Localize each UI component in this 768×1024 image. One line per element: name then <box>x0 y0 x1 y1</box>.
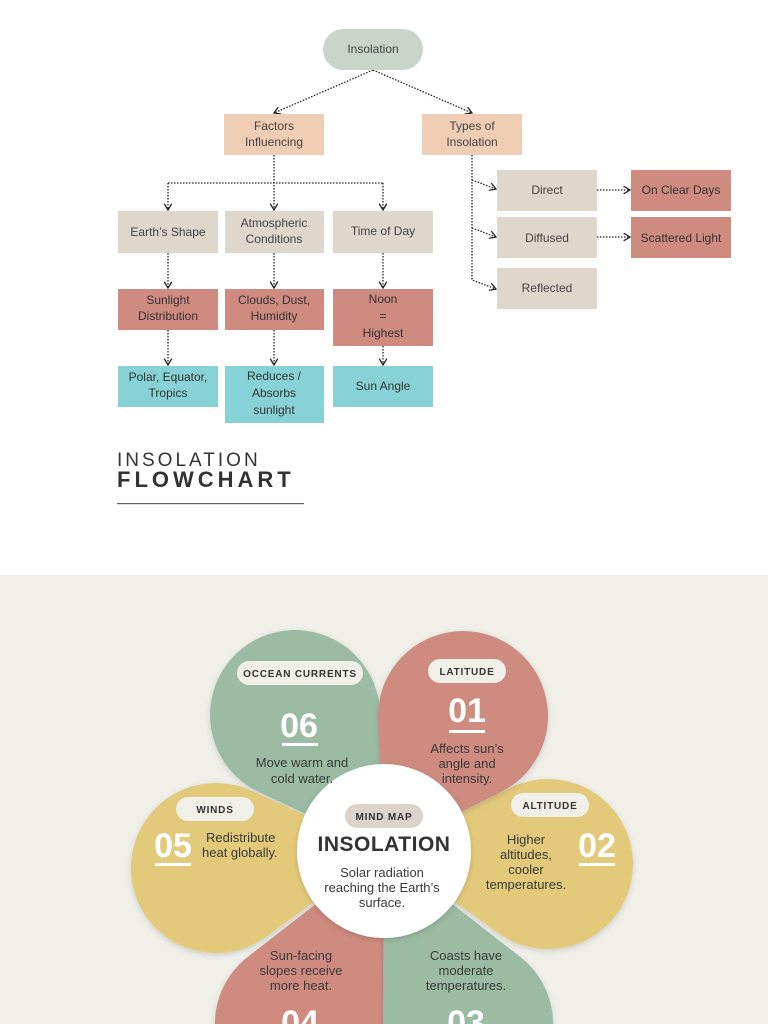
node: Clouds Dust Humidity: Humidity <box>251 309 297 323</box>
center circle <box>297 764 471 938</box>
petal 01 content <box>428 659 506 786</box>
node: Scattered Light <box>631 217 731 258</box>
node: Direct <box>497 170 597 211</box>
node: Reduces Absorbs sunlight <box>225 366 324 423</box>
center content <box>318 804 450 910</box>
node: Types of Insolation <box>422 114 522 155</box>
petal 01 <box>378 631 548 851</box>
petal 03 <box>383 851 553 1024</box>
center content: INSOLATION <box>318 833 450 856</box>
node: Noon = Highest: = <box>379 309 387 323</box>
petal 04 content <box>259 948 343 1024</box>
node: Reduces Absorbs sunlight: Absorbs <box>252 386 296 400</box>
petal 01 content: LATITUDE <box>439 667 495 678</box>
node: Insolation: Insolation <box>347 42 399 56</box>
node: Atmospheric Conditions: Conditions <box>246 232 302 246</box>
node: Reflected <box>497 268 597 309</box>
node: Types of Insolation: Types of <box>449 119 495 133</box>
petal 01 content: intensity. <box>442 771 492 786</box>
node: Atmospheric Conditions <box>225 211 324 253</box>
petal 06 <box>210 630 384 851</box>
petal 02 content: ALTITUDE <box>522 801 578 812</box>
node: Factors Influencing <box>224 114 324 155</box>
node: Insolation <box>323 29 423 70</box>
petal 03 content: moderate <box>439 963 493 978</box>
petal 02 content: altitudes, <box>500 847 552 862</box>
flowchart title: FLOWCHART <box>117 467 295 492</box>
petal 02 content: temperatures. <box>486 877 566 892</box>
petal 04 content: Sun-facing <box>270 948 332 963</box>
center content: reaching the Earth’s <box>324 880 440 895</box>
petal 04 content: slopes receive <box>259 963 343 978</box>
flowchart title: INSOLATION <box>117 450 261 471</box>
petal 05 content: 05 <box>154 827 192 865</box>
petal 01 content: 01 <box>448 692 486 730</box>
node: Sunlight Distribution: Sunlight <box>146 293 190 307</box>
node: Sunlight Distribution: Distribution <box>138 309 198 323</box>
node: Reflected: Reflected <box>522 281 572 295</box>
petal 05 <box>131 783 384 953</box>
node: Diffused <box>497 217 597 258</box>
node: Factors Influencing: Factors <box>254 119 294 133</box>
center content: MIND MAP <box>356 812 412 823</box>
petal 05 content: Redistribute <box>206 830 275 845</box>
node: Sun Angle: Sun Angle <box>356 379 411 393</box>
petal 03 content <box>426 948 506 1024</box>
node: Noon = Highest: Noon <box>369 292 397 306</box>
petal 02 content: 02 <box>578 827 616 865</box>
node: On Clear Days: On Clear Days <box>642 183 720 197</box>
node: Clouds Dust Humidity <box>225 289 324 330</box>
node: Time of Day: Time of Day <box>351 224 415 238</box>
node: Sun Angle <box>333 366 433 407</box>
node: Polar Equator Tropics: Tropics <box>149 386 187 400</box>
node: Diffused: Diffused <box>525 231 569 245</box>
mind map background <box>0 575 768 1024</box>
connectors <box>168 70 630 365</box>
petal 06 content: 06 <box>280 707 318 745</box>
node: Noon = Highest: Highest <box>363 326 404 340</box>
node: Clouds Dust Humidity: Clouds, Dust, <box>238 293 310 307</box>
center content: surface. <box>359 895 405 910</box>
petal 06 content: cold water. <box>271 771 333 786</box>
petal 04 content: more heat. <box>270 978 332 993</box>
node: Atmospheric Conditions: Atmospheric <box>241 216 307 230</box>
node: Scattered Light: Scattered Light <box>641 231 722 245</box>
petal 05 content: WINDS <box>196 805 234 816</box>
petal 02 <box>384 779 633 949</box>
petal 02 content <box>486 793 616 892</box>
node: Polar Equator Tropics: Polar, Equator, <box>129 370 207 384</box>
petal 01 content: Affects sun’s <box>430 741 504 756</box>
node: Earth's Shape: Earth’s Shape <box>130 225 206 239</box>
node: Polar Equator Tropics <box>118 366 218 407</box>
node: Reduces Absorbs sunlight: Reduces / <box>247 369 302 383</box>
mind map <box>131 630 633 1024</box>
petal 01 content: angle and <box>438 756 496 771</box>
petal 03 content: temperatures. <box>426 978 506 993</box>
flowchart title <box>117 450 304 504</box>
petal 06 content: Move warm and <box>256 755 348 770</box>
node: On Clear Days <box>631 170 731 211</box>
node: Direct: Direct <box>531 183 563 197</box>
node: Earth's Shape <box>118 211 218 253</box>
petal 02 content: cooler <box>508 862 544 877</box>
petal 05 content <box>154 797 278 866</box>
center content: Solar radiation <box>340 865 424 880</box>
node: Sunlight Distribution <box>118 289 218 330</box>
node: Reduces Absorbs sunlight: sunlight <box>253 403 295 417</box>
petal 06 content: OCCEAN CURRENTS <box>243 669 357 680</box>
node: Types of Insolation: Insolation <box>446 135 498 149</box>
petal 06 content <box>237 661 363 786</box>
node: Factors Influencing: Influencing <box>245 135 303 149</box>
petal 04 <box>215 851 385 1024</box>
petal 02 content: Higher <box>507 832 546 847</box>
node: Time of Day <box>333 211 433 253</box>
node: Noon = Highest <box>333 289 433 346</box>
petal 05 content: heat globally. <box>202 845 278 860</box>
petal 03 content: Coasts have <box>430 948 502 963</box>
